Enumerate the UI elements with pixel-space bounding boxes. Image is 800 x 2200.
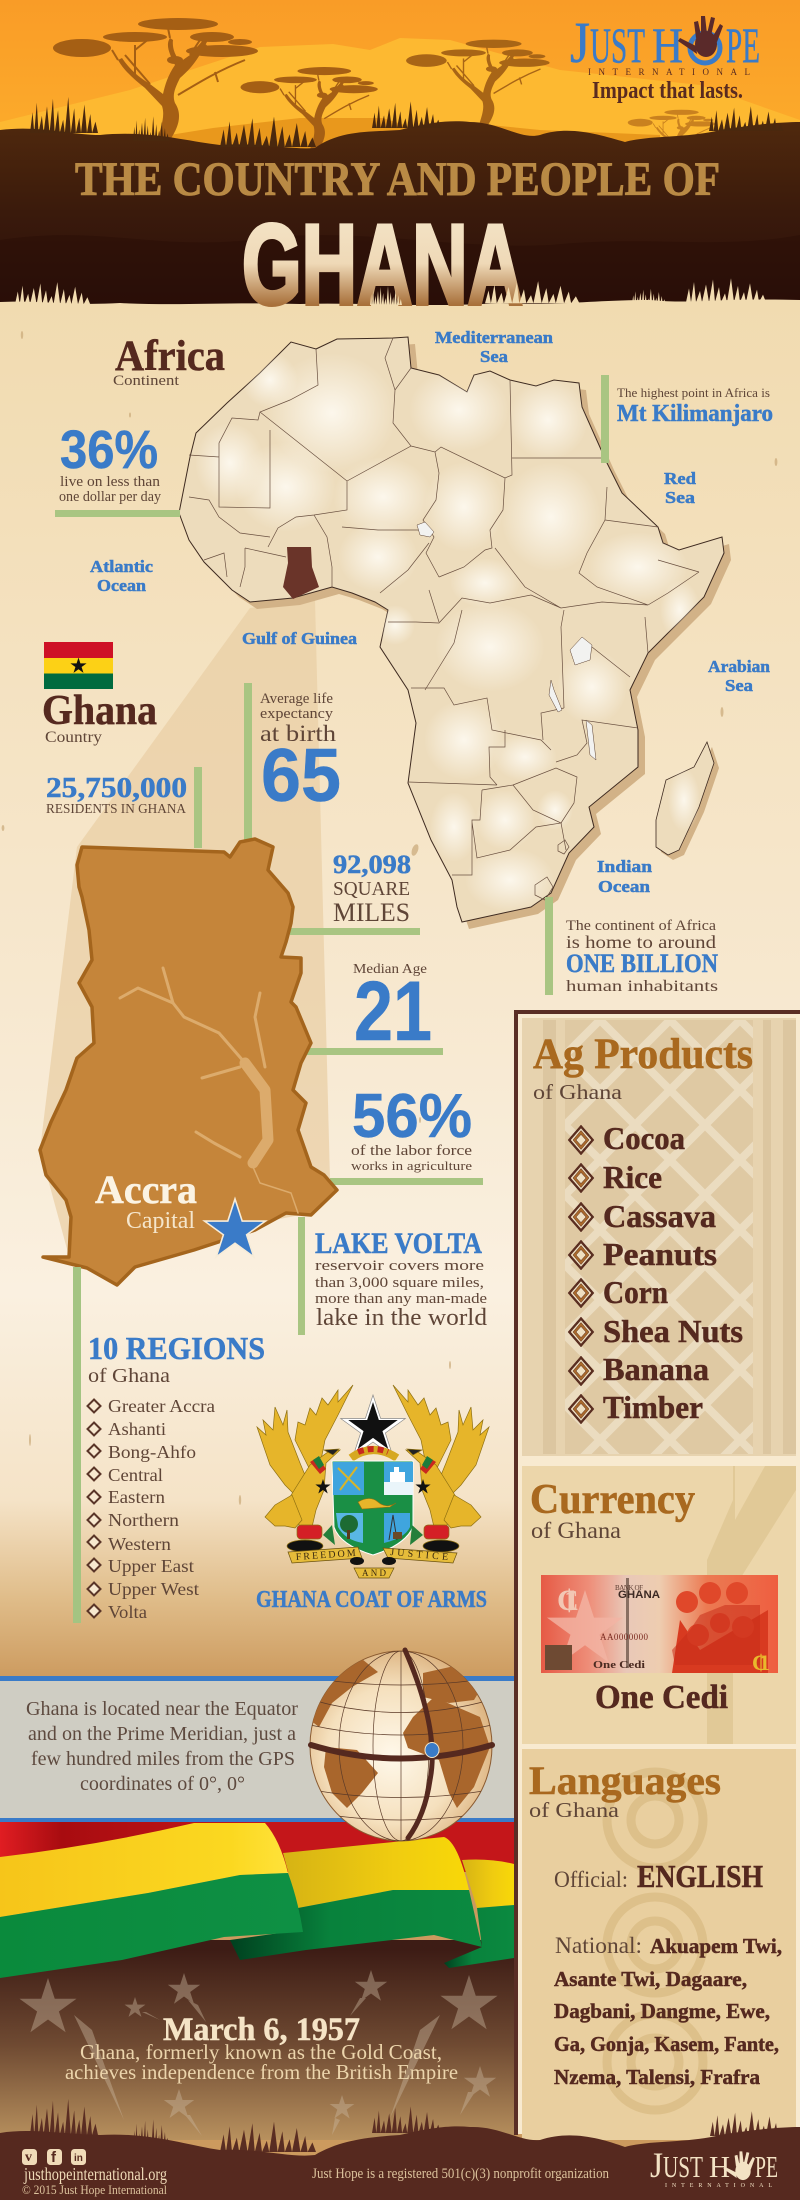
continent fill [179, 337, 724, 922]
panel: Ag Products: Banana [603, 1351, 709, 1387]
regions list: Central [108, 1465, 163, 1485]
top grass [30, 97, 783, 147]
panel: Languages [522, 1749, 796, 2140]
panel: Ag Products: Shea Nuts [603, 1313, 743, 1349]
label: Red Sea: Sea [665, 488, 696, 507]
motto scrolls: AND [362, 1568, 386, 1578]
callout: median age: 21 [354, 964, 432, 1058]
coat of arms [256, 1385, 489, 1613]
panel: Ag Products: Ag Products [533, 1031, 753, 1078]
regions list: 10 REGIONS [88, 1330, 265, 1366]
map: Africa [179, 337, 731, 929]
logo: Just Hope International: Impact that lasts. [592, 78, 743, 104]
panel: Ag Products: of Ghana [533, 1080, 623, 1104]
callout: Africa heading: Africa [115, 333, 225, 380]
prime meridian and equator [311, 1745, 492, 1758]
GHANA title: GHANA [242, 202, 523, 329]
coast shadow [186, 344, 731, 929]
logo: Just Hope International: INTERNATIONAL [588, 67, 750, 77]
callout: square miles: MILES [333, 898, 410, 927]
coat of arms caption: GHANA COAT OF ARMS [256, 1587, 487, 1613]
callout: 36 percent: 36% [60, 420, 158, 480]
icon: capital star [205, 1199, 265, 1257]
flag ribbon [0, 1822, 514, 1978]
right column border [514, 1010, 800, 2135]
logo: Just Hope International: H [652, 17, 683, 73]
lakes [417, 522, 596, 760]
label: Atlantic Ocean [90, 557, 153, 595]
panel: Languages: Languages [529, 1758, 721, 1803]
website: justhopeinternational.org [23, 2164, 167, 2184]
Madagascar [661, 747, 719, 860]
logo: Just Hope International: J [570, 10, 590, 75]
regions list: Volta [108, 1602, 147, 1622]
callout: square miles [290, 850, 420, 935]
label: Atlantic Ocean: Ocean [97, 576, 147, 595]
panel: Currency: of Ghana [531, 1518, 621, 1543]
callout: 36 percent [55, 420, 180, 517]
banknote: AA0000000 [600, 1632, 648, 1642]
logo: Just Hope International [570, 10, 760, 104]
label: Mediterranean Sea: Sea [480, 347, 509, 366]
callout: labor force: 56% [352, 1082, 472, 1151]
callout: life expectancy: Average life [260, 691, 333, 707]
label: Indian Ocean: Ocean [598, 877, 651, 896]
footer [0, 2099, 800, 2200]
label: Mediterranean Sea: Mediterranean [435, 328, 554, 347]
callout: labor force [330, 1082, 483, 1185]
panel: Ag Products: Cocoa [603, 1120, 685, 1156]
stars and trails [19, 1970, 498, 2136]
label: Indian Ocean [597, 857, 653, 896]
panel: Languages: Akuapem Twi, [650, 1934, 782, 1958]
motto scrolls: FREEDOM [295, 1548, 356, 1563]
independence date: March 6, 1957 [163, 2012, 360, 2048]
footer logo: PE [755, 2149, 778, 2184]
label: Indian Ocean: Indian [597, 857, 653, 876]
callout: Lake Volta [298, 1217, 487, 1335]
banknote: One Cedi [593, 1659, 645, 1671]
regions list: Ashanti [108, 1419, 166, 1439]
callout: Mt Kilimanjaro: Mt Kilimanjaro [617, 401, 773, 427]
panel: equator note: few hundred miles from the GPS [31, 1748, 295, 1770]
logo: Just Hope International: PE [726, 17, 760, 73]
callout: labor force: of the labor force [351, 1143, 472, 1159]
country borders [189, 338, 699, 875]
panel: Ag Products: Timber [603, 1389, 703, 1425]
callout: 36 percent: one dollar per day [59, 489, 161, 505]
callout: One Billion: ONE BILLION [566, 949, 718, 978]
callout: One Billion: The continent of Africa [566, 918, 716, 934]
callout: residents: RESIDENTS IN GHANA [46, 802, 187, 817]
banknote: ₵1 [557, 1584, 579, 1617]
label: Arabian Sea: Arabian [708, 657, 771, 676]
banknote: GHANA [618, 1589, 660, 1601]
motto scrolls [288, 1547, 457, 1578]
label: Mediterranean Sea [435, 328, 554, 366]
callout: square miles: 92,098 [333, 850, 411, 879]
social icons: in [74, 2153, 83, 2164]
panel: Ag Products: Peanuts [603, 1236, 717, 1272]
panel: Ag Products: Cassava [603, 1198, 716, 1234]
callout: median age [301, 962, 443, 1058]
panel: Currency: One Cedi [595, 1679, 728, 1716]
panel: Ag Products [518, 1014, 800, 2134]
globe [310, 1650, 492, 1841]
footer logo: INTERNATIONAL [665, 2183, 772, 2189]
regions list: Northern [108, 1510, 179, 1530]
panel: Languages: Asante Twi, Dagaare, [554, 1967, 747, 1991]
label: Arabian Sea: Sea [725, 676, 754, 695]
footer logo [650, 2145, 778, 2189]
copyright: © 2015 Just Hope International [22, 2182, 167, 2197]
panel: Currency [522, 1466, 796, 1744]
map: Ghana: Capital [126, 1208, 195, 1234]
logo: Just Hope International: UST [590, 17, 645, 73]
callout: Lake Volta: LAKE VOLTA [315, 1227, 482, 1260]
panel: Languages: Nzema, Talensi, Frafra [554, 2065, 760, 2089]
panel: independence: achieves independence from the British Empire [65, 2060, 458, 2084]
callout: Mt Kilimanjaro: The highest point in Africa is [617, 385, 770, 400]
Ghana marker [425, 1742, 439, 1758]
panel: Ag Products: Corn [603, 1274, 668, 1310]
panel: equator note: Ghana is located near the Equator [26, 1698, 298, 1720]
label: Arabian Sea [708, 657, 771, 695]
speckle texture [2, 331, 777, 2105]
regions list [73, 1267, 265, 1623]
panel: independence [0, 1940, 514, 2140]
callout: 36 percent: live on less than [60, 474, 161, 490]
dark earth band [0, 121, 800, 305]
callout: life expectancy: expectancy [260, 706, 334, 722]
social icons: f [51, 2149, 57, 2166]
cream grass [15, 278, 766, 305]
panel: equator note [0, 1676, 514, 1823]
panel: Languages: Ga, Gonja, Kasem, Fante, [554, 2032, 779, 2056]
panel: Languages: of Ghana [529, 1798, 620, 1822]
social icons [22, 2149, 86, 2166]
panel: Languages: Dagbani, Dangme, Ewe, [554, 1999, 770, 2023]
banknote [541, 1575, 778, 1675]
callout: Lake Volta: reservoir covers more [315, 1258, 484, 1274]
regions list: of Ghana [88, 1365, 170, 1387]
banknote: BANK OF [615, 1584, 643, 1592]
callout: residents [46, 767, 202, 848]
callout: Ghana heading: Country [45, 729, 102, 746]
independence text: Ghana, formerly known as the Gold Coast, [80, 2040, 442, 2064]
nonprofit note: Just Hope is a registered 501(c)(3) nonprofit organization [312, 2166, 609, 2182]
callout: One Billion: human inhabitants [566, 978, 718, 995]
panel: Currency: Currency [530, 1477, 695, 1523]
globe grid [310, 1651, 492, 1841]
panel: equator note: and on the Prime Meridian, just a [28, 1723, 296, 1745]
regions list: Upper East [108, 1556, 194, 1576]
callout: residents: 25,750,000 [46, 773, 187, 804]
banknote: ₵1 [752, 1650, 770, 1675]
regions list: Upper West [108, 1579, 199, 1599]
panel: Languages: National: [555, 1933, 642, 1958]
callout: life expectancy: 65 [261, 733, 341, 817]
savanna trees [53, 18, 716, 162]
projection beam from Africa to Ghana [40, 600, 330, 1260]
callout: Lake Volta: than 3,000 square miles, [315, 1275, 484, 1291]
regions list: Bong-Ahfo [108, 1442, 196, 1462]
panel: equator note: coordinates of 0°, 0° [80, 1773, 245, 1795]
footer grass [30, 2099, 784, 2152]
footer logo: H [709, 2149, 730, 2184]
motto scrolls: JUSTICE [390, 1547, 448, 1563]
panel: Languages: ENGLISH [637, 1858, 763, 1894]
icon: flag of Ghana [44, 642, 113, 689]
map: Ghana [40, 839, 337, 1285]
callout: Africa heading: Continent [113, 373, 180, 389]
callout: One Billion [545, 897, 718, 995]
footer logo: J [650, 2145, 663, 2185]
social icons: v [25, 2150, 32, 2165]
callout: life expectancy: at birth [260, 721, 337, 746]
callout: Lake Volta: lake in the world [316, 1305, 487, 1331]
callout: median age: Median Age [353, 962, 427, 977]
callout: Lake Volta: more than any man-made [315, 1291, 487, 1307]
panel: Languages: Official: [554, 1867, 628, 1892]
callout: square miles: SQUARE [333, 878, 410, 900]
label: Red Sea: Red [664, 469, 697, 488]
panel: Ag Products: Rice [603, 1159, 662, 1195]
header banner [0, 0, 800, 329]
Lake Volta shape [120, 968, 298, 1213]
callout: One Billion: is home to around [566, 932, 716, 952]
callout: life expectancy [244, 683, 341, 840]
callout: Mt Kilimanjaro [601, 375, 773, 463]
label: Red Sea [664, 469, 697, 507]
label: Gulf of Guinea: Gulf of Guinea [242, 629, 358, 648]
Ghana highlight [283, 547, 319, 599]
regions list: Western [108, 1534, 171, 1554]
globe continents [310, 1655, 490, 1808]
callout: Ghana heading: Ghana [42, 688, 157, 734]
footer logo: UST [663, 2149, 703, 2184]
regions list: Eastern [108, 1487, 165, 1507]
Accra label: Accra [95, 1167, 197, 1212]
regions list: Greater Accra [108, 1396, 215, 1416]
label: Atlantic Ocean: Atlantic [90, 557, 153, 576]
callout: labor force: works in agriculture [351, 1158, 472, 1173]
